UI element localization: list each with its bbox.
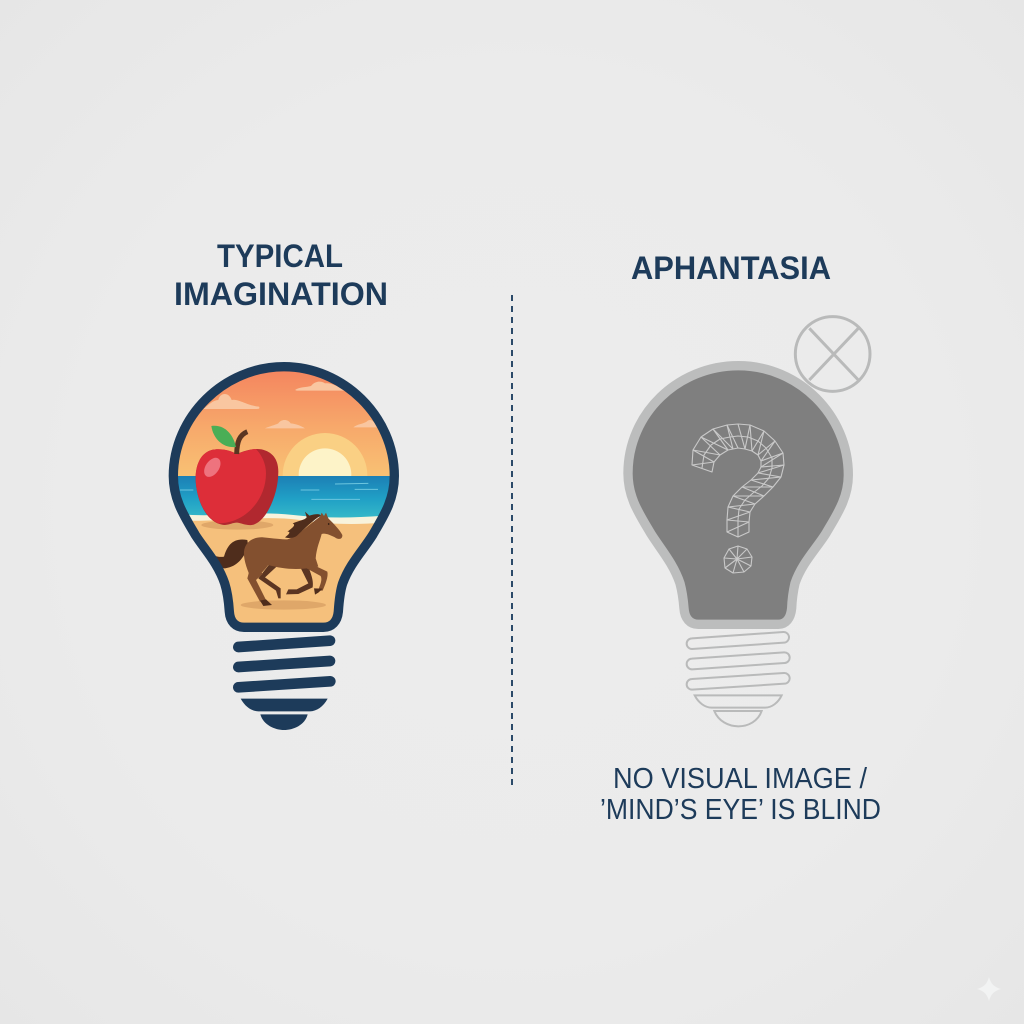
water glints bbox=[180, 483, 378, 499]
apple shadow bbox=[202, 522, 274, 530]
heading: aphantasia: APHANTASIA bbox=[631, 250, 831, 286]
sun bbox=[282, 433, 368, 476]
dark bulb glass bbox=[628, 366, 848, 624]
colourful light bulb: typical imagination bbox=[170, 367, 397, 730]
sky bbox=[178, 371, 390, 476]
wireframe dot bbox=[724, 546, 752, 573]
apple bbox=[196, 426, 278, 525]
bulb glass outline bbox=[173, 367, 394, 627]
heading: typical imagination bbox=[174, 238, 388, 312]
grey light bulb: aphantasia bbox=[628, 317, 870, 726]
sparkle mark bbox=[977, 977, 1001, 1001]
clouds bbox=[203, 382, 377, 428]
beach scene inside bulb bbox=[178, 371, 390, 623]
heading: typical imagination: TYPICAL bbox=[217, 238, 343, 274]
base tip bbox=[260, 714, 308, 730]
base cap bbox=[241, 699, 328, 711]
caption: no visual image bbox=[600, 763, 881, 826]
sea bbox=[170, 476, 397, 518]
horse bbox=[213, 512, 342, 606]
horse shadow bbox=[241, 600, 326, 610]
center dashed divider bbox=[511, 295, 513, 790]
foam bbox=[180, 513, 393, 524]
caption: no visual image: NO VISUAL IMAGE / bbox=[613, 763, 868, 795]
sand bbox=[192, 518, 374, 623]
heading: typical imagination: IMAGINATION bbox=[174, 276, 388, 312]
wireframe question mark bbox=[692, 424, 784, 573]
screw base bbox=[238, 641, 330, 687]
crossed circle icon bbox=[795, 317, 870, 391]
caption: no visual image: ’MIND’S EYE’ IS BLIND bbox=[600, 794, 881, 826]
screw base outlines bbox=[687, 632, 790, 726]
